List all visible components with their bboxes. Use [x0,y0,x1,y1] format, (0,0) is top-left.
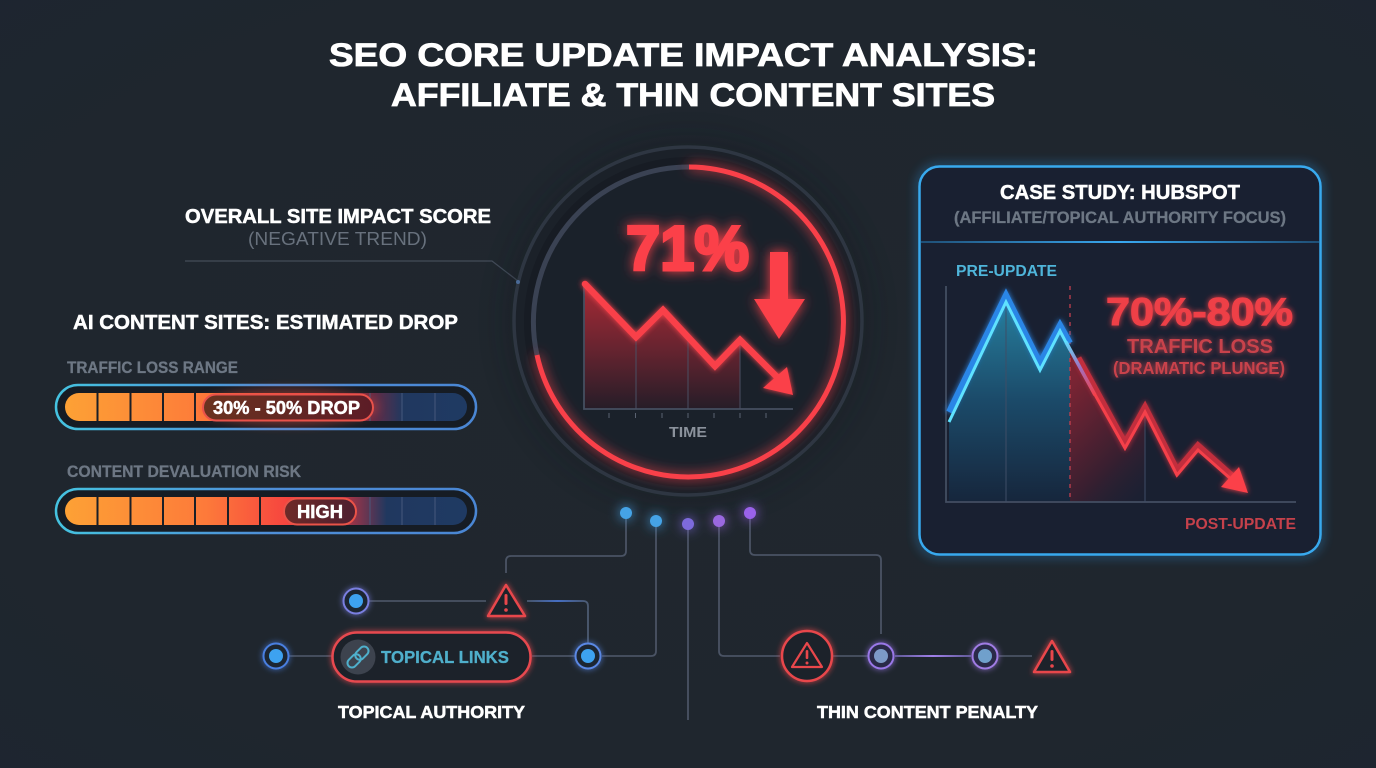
line chart: traffic plunge [946,286,1296,502]
panel: overall site impact label: OVERALL SITE IMPACT SCORE [185,206,491,228]
pill: topical links [332,632,530,682]
heading: thin content penalty: THIN CONTENT PENALTY [817,702,1038,722]
panel: case study [919,166,1321,555]
label: post-update: POST-UPDATE [1185,516,1296,533]
title: AFFILIATE & THIN CONTENT SITES [391,77,995,113]
node: far left [264,644,288,668]
node: right of topical links [576,644,600,668]
icon: warning triangle upper [488,585,525,616]
panel: AI content sites [56,312,476,533]
label: pre-update: PRE-UPDATE [956,263,1057,280]
gauge: overall impact score [502,135,874,507]
subheading: focus: (AFFILIATE/TOPICAL AUTHORITY FOCUS) [954,208,1286,227]
heading: AI content sites: AI CONTENT SITES: ESTIMATED DROP [73,312,458,334]
label: topical links: TOPICAL LINKS [381,647,509,667]
progress bar: traffic loss range [56,359,476,429]
big percentage: 71% [626,214,749,284]
axis label: time: TIME [669,425,707,441]
stat: traffic loss [1106,291,1293,378]
heading: case study: CASE STUDY: HUBSPOT [1000,182,1240,204]
stat: traffic loss: TRAFFIC LOSS [1127,336,1273,358]
heading: topical authority: TOPICAL AUTHORITY [338,702,525,722]
icon: chain link [340,640,376,674]
connector dots [620,507,756,530]
progress bar: traffic loss range: TRAFFIC LOSS RANGE [67,359,238,377]
icon: warning in circle [782,631,832,681]
progress bar: content devaluation risk [56,463,476,533]
panel: overall site impact label [185,206,518,281]
node: upper left [344,588,368,614]
icon: warning triangle right [1034,641,1070,672]
gauge track [533,167,689,355]
gauge red arc [537,167,843,477]
stat: traffic loss: 70%-80% [1106,291,1293,334]
title: SEO CORE UPDATE IMPACT ANALYSIS: [329,37,1038,73]
progress bar: content devaluation risk: HIGH [297,502,343,522]
stat: traffic loss: (DRAMATIC PLUNGE) [1113,358,1285,378]
connector network [289,513,1032,720]
down arrow [754,252,805,339]
progress bar: traffic loss range: 30% - 50% DROP [213,398,360,418]
progress bar: content devaluation risk: CONTENT DEVALUATION RISK [67,463,301,481]
panel: overall site impact label: (NEGATIVE TREND) [248,229,427,249]
node: purple one [868,644,894,668]
title [329,37,1038,113]
node: purple two [972,644,998,668]
line chart: negative trend [584,283,793,418]
